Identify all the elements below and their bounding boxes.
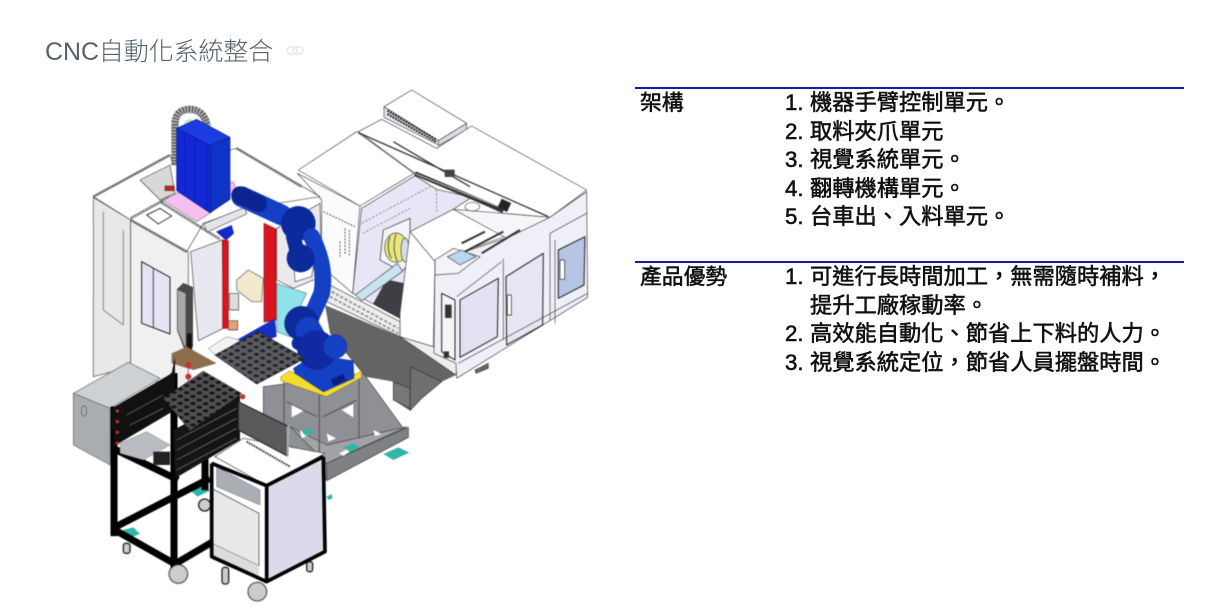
item 1: 機器手臂控制單元。 bbox=[810, 90, 1010, 115]
machining center top bbox=[93, 148, 320, 252]
cabinet inner shelf bbox=[217, 467, 260, 505]
lathe base bbox=[325, 305, 456, 411]
machining center bbox=[93, 109, 322, 400]
light blue arm bbox=[355, 263, 403, 301]
advantage 3: 視覺系統定位，節省人員擺盤時間。 bbox=[810, 350, 1166, 374]
grey electrical box bbox=[73, 362, 160, 465]
lathe left enclosure panel bbox=[297, 173, 360, 293]
yellow platform bbox=[281, 371, 362, 397]
title: CNC自動化系統整合 bbox=[45, 38, 273, 66]
divider: advantages section bbox=[635, 261, 1184, 263]
cable chain bbox=[175, 109, 207, 165]
item 2: 2. bbox=[785, 118, 804, 144]
heading: 產品優勢: 產品優勢 bbox=[640, 264, 727, 289]
advantage 2: 高效能自動化、節省上下料的人力。 bbox=[810, 321, 1166, 346]
lathe guide rail bbox=[415, 173, 503, 211]
yellow chuck bbox=[385, 233, 409, 262]
advantage 3: 3. bbox=[785, 350, 804, 374]
cabinet side bbox=[267, 458, 325, 581]
machining center front panel bbox=[131, 220, 188, 400]
upper tray bbox=[215, 332, 305, 384]
machine window bbox=[142, 262, 170, 334]
illustration: CNC automation cell bbox=[72, 89, 589, 602]
cabinet door bbox=[212, 488, 259, 566]
item 3: 視覺系統單元。 bbox=[810, 147, 966, 172]
vision camera bbox=[177, 283, 193, 353]
item 4: 4. bbox=[785, 176, 804, 200]
item 5: 5. bbox=[785, 204, 804, 229]
lathe work chamber bbox=[353, 176, 472, 318]
list: product advantages bbox=[785, 264, 1166, 374]
stand gaps bbox=[292, 403, 382, 456]
item 5: 台車出、入料單元。 bbox=[810, 204, 1010, 229]
black rack panels bbox=[112, 357, 245, 478]
light grey beam bbox=[203, 207, 247, 232]
lathe front panel bbox=[434, 192, 588, 378]
robot forearm bbox=[308, 237, 323, 323]
pink plate bbox=[163, 182, 237, 222]
item 1: 1. bbox=[785, 90, 804, 115]
monitor bbox=[238, 402, 289, 457]
cart contents bbox=[120, 432, 170, 460]
brown fixture bbox=[172, 347, 217, 370]
teal feet bbox=[123, 428, 409, 537]
machining center left panel bbox=[93, 197, 131, 377]
cyan panel bbox=[277, 283, 307, 337]
lower tray stack bbox=[163, 371, 242, 431]
lathe control panel bbox=[435, 230, 520, 275]
lathe top box bbox=[384, 90, 467, 146]
lathe machine bbox=[297, 90, 588, 411]
blue column bbox=[177, 119, 230, 213]
lathe top cover bbox=[358, 119, 587, 217]
list: structure items bbox=[785, 90, 1010, 229]
item 2: 取料夾爪單元 bbox=[810, 118, 944, 144]
divider: structure section bbox=[635, 87, 1184, 89]
advantage 1: 可進行長時間加工，無需隨時補料， bbox=[810, 264, 1166, 289]
red columns bbox=[223, 223, 276, 328]
work cart and stand bbox=[73, 331, 409, 601]
icon: link bbox=[286, 46, 304, 55]
cabinet bbox=[212, 438, 325, 582]
advantage 1 continued: 提升工廠稼動率。 bbox=[810, 292, 988, 318]
advantage 2: 2. bbox=[785, 321, 804, 346]
item 4: 翻轉機構單元。 bbox=[810, 176, 966, 200]
lathe deck bbox=[453, 209, 550, 240]
heading: 架構: 架構 bbox=[640, 90, 684, 115]
cabinet top bbox=[215, 438, 325, 486]
robot arm bbox=[240, 195, 327, 357]
robot base bbox=[293, 331, 354, 392]
advantage 1: 1. bbox=[785, 264, 804, 289]
black cart frame bbox=[114, 377, 210, 567]
robot stand bbox=[263, 373, 408, 481]
item 3: 3. bbox=[785, 147, 804, 172]
robot upper arm bbox=[242, 197, 282, 215]
machining center interior bbox=[188, 200, 322, 337]
lathe front white block bbox=[410, 209, 512, 262]
dark blue bracket bbox=[216, 225, 234, 241]
beige box bbox=[237, 270, 263, 302]
casters bbox=[123, 499, 313, 601]
